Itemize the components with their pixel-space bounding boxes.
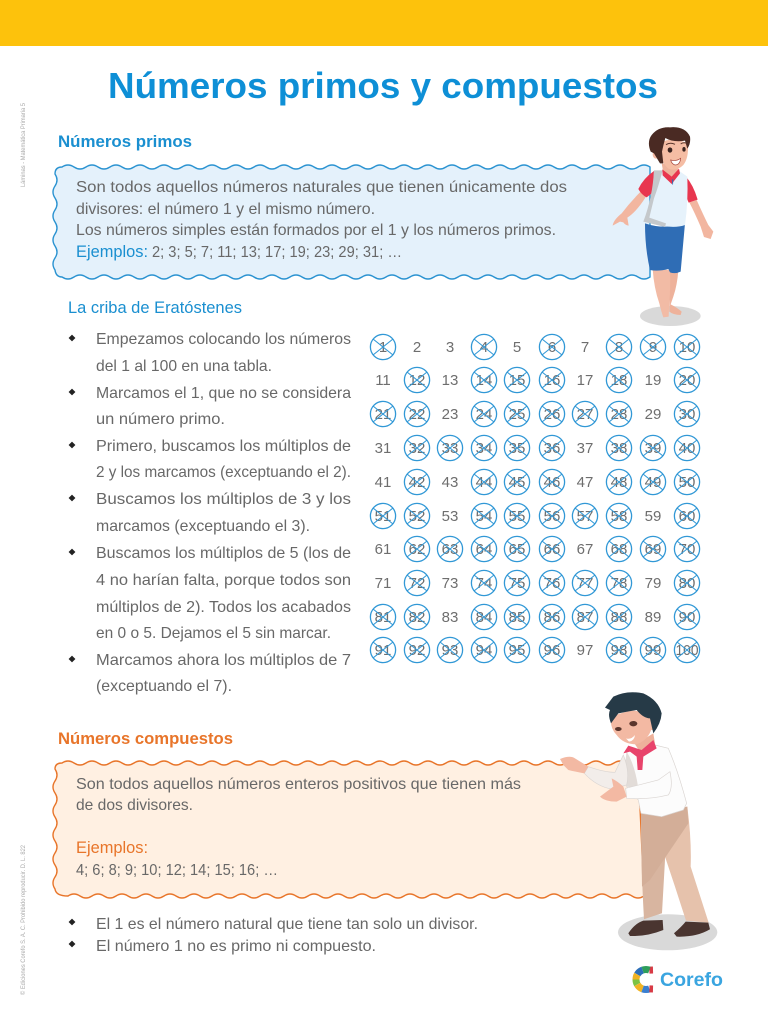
panel: números primos [53, 165, 650, 279]
sieve table 1 to 100: 55 [509, 508, 525, 525]
sieve table 1 to 100: 71 [375, 575, 391, 592]
sieve table 1 to 100: 93 [442, 642, 458, 659]
sieve table 1 to 100: 56 [544, 508, 560, 525]
sieve table 1 to 100: 7 [581, 339, 589, 356]
sieve table 1 to 100: 90 [679, 609, 695, 626]
sieve table 1 to 100: 86 [544, 609, 560, 626]
sieve table 1 to 100: 24 [476, 406, 492, 423]
sieve table 1 to 100: 91 [375, 642, 391, 659]
sieve table 1 to 100: 10 [679, 339, 695, 356]
sieve table 1 to 100 [370, 334, 700, 663]
sieve table 1 to 100: 44 [476, 474, 492, 491]
sieve table 1 to 100: 40 [679, 440, 695, 457]
sieve table 1 to 100: 77 [577, 575, 593, 592]
panel text: definition: 2; 3; 5; 7; 11; 13; 17; 19; 23; 29; 31; … [152, 244, 402, 261]
sieve table 1 to 100: 31 [375, 440, 391, 457]
panel: números compuestos [53, 761, 644, 898]
sieve table 1 to 100: 70 [679, 541, 695, 558]
sieve table 1 to 100: 97 [577, 642, 593, 659]
sieve table 1 to 100: 92 [409, 642, 425, 659]
panel text: definition: Son todos aquellos números naturales que tienen únicamente dos [76, 179, 567, 196]
sieve table 1 to 100: 32 [409, 440, 425, 457]
panel text: definition: Ejemplos: [76, 242, 148, 261]
sieve table 1 to 100: 58 [611, 508, 627, 525]
sieve table 1 to 100: 38 [611, 440, 627, 457]
sieve table 1 to 100: 89 [645, 609, 661, 626]
sieve table 1 to 100: 45 [509, 474, 525, 491]
sieve table 1 to 100: 20 [679, 372, 695, 389]
sieve table 1 to 100: 76 [544, 575, 560, 592]
sieve table 1 to 100: 46 [544, 474, 560, 491]
text block: sieve steps: 4 no harían falta, porque todos son [96, 572, 351, 589]
sieve table 1 to 100: 99 [645, 642, 661, 659]
side note: copyright: © Ediciones Corefo S. A. C. Prohibido reproducir. D. L. 822 [19, 845, 27, 995]
text block: sieve steps: Marcamos ahora los múltiplos de 7 [96, 652, 351, 669]
sieve table 1 to 100: 60 [679, 508, 695, 525]
panel text: composite definition: de dos divisores. [76, 797, 193, 814]
sieve table 1 to 100: 6 [548, 339, 556, 356]
text block: sieve steps: del 1 al 100 en una tabla. [96, 358, 272, 375]
sieve table 1 to 100: 12 [409, 372, 425, 389]
sieve table 1 to 100: 21 [375, 406, 391, 423]
head [649, 127, 690, 185]
text block: sieve steps: marcamos (exceptuando el 3). [96, 518, 310, 535]
sieve table 1 to 100: 34 [476, 440, 492, 457]
text block: sieve steps: en 0 o 5. Dejamos el 5 sin marcar. [96, 625, 331, 642]
sieve table 1 to 100: 69 [645, 541, 661, 558]
sieve table 1 to 100: 4 [480, 339, 488, 356]
panel text: definition [76, 179, 567, 261]
sieve table 1 to 100: 73 [442, 575, 458, 592]
sieve table 1 to 100: 54 [476, 508, 492, 525]
sieve table 1 to 100: 95 [509, 642, 525, 659]
sieve table 1 to 100: 27 [577, 406, 593, 423]
text block: sieve steps: Primero, buscamos los múltiplos de [96, 438, 351, 455]
top banner [0, 0, 768, 46]
sieve table 1 to 100: 22 [409, 406, 425, 423]
sieve table 1 to 100: 42 [409, 474, 425, 491]
sieve table 1 to 100: 14 [476, 372, 492, 389]
sieve table 1 to 100: 53 [442, 508, 458, 525]
sieve table 1 to 100: 85 [509, 609, 525, 626]
sieve table 1 to 100: 64 [476, 541, 492, 558]
character: boy in white shirt [560, 692, 717, 950]
heading: criba: La criba de Eratóstenes [68, 299, 242, 317]
sieve table 1 to 100: 98 [611, 642, 627, 659]
sieve table 1 to 100: 75 [509, 575, 525, 592]
sieve table 1 to 100: 57 [577, 508, 593, 525]
sieve table 1 to 100: 15 [509, 372, 525, 389]
sieve table 1 to 100: 96 [544, 642, 560, 659]
sieve table 1 to 100: 16 [544, 372, 560, 389]
sieve table 1 to 100: 63 [442, 541, 458, 558]
sieve table 1 to 100: 19 [645, 372, 661, 389]
panel text: composite definition [76, 776, 521, 879]
sieve table 1 to 100: 49 [645, 474, 661, 491]
sieve table 1 to 100: 52 [409, 508, 425, 525]
sieve table 1 to 100: 18 [611, 372, 627, 389]
text block: sieve steps: Buscamos los múltiplos de 5 (los de [96, 545, 351, 562]
sieve table 1 to 100: 33 [442, 440, 458, 457]
sieve table 1 to 100: 59 [645, 508, 661, 525]
sieve table 1 to 100: 81 [375, 609, 391, 626]
sieve table 1 to 100: 79 [645, 575, 661, 592]
sieve table 1 to 100: 26 [544, 406, 560, 423]
sieve table 1 to 100: 1 [379, 339, 387, 356]
text block: sieve steps: un número primo. [96, 411, 225, 428]
side note: series: Láminas - Matemática Primaria 5 [20, 103, 27, 187]
sieve table 1 to 100: 51 [375, 508, 391, 525]
sieve table 1 to 100: 25 [509, 406, 525, 423]
sieve table 1 to 100: 68 [611, 541, 627, 558]
sieve table 1 to 100: 82 [409, 609, 425, 626]
character: boy in blue shorts [613, 127, 713, 326]
sieve table 1 to 100: 17 [577, 372, 593, 389]
title: Números primos y compuestos [108, 65, 658, 106]
sieve table 1 to 100: 80 [679, 575, 695, 592]
sieve table 1 to 100: 13 [442, 372, 458, 389]
sieve table 1 to 100: 11 [375, 372, 391, 389]
sieve table 1 to 100: 37 [577, 440, 593, 457]
text block: sieve steps: 2 y los marcamos (exceptuando el 2). [96, 464, 351, 481]
sieve table 1 to 100: 88 [611, 609, 627, 626]
sieve table 1 to 100: 84 [476, 609, 492, 626]
sieve table 1 to 100: 100 [676, 642, 698, 659]
sieve table 1 to 100: 36 [544, 440, 560, 457]
sieve table 1 to 100: 48 [611, 474, 627, 491]
sieve table 1 to 100: 39 [645, 440, 661, 457]
sieve table 1 to 100: 72 [409, 575, 425, 592]
panel text: composite definition: Ejemplos: [76, 838, 148, 857]
notes below panel: El número 1 no es primo ni compuesto. [96, 938, 376, 955]
sieve table 1 to 100: 83 [442, 609, 458, 626]
sieve table 1 to 100: 66 [544, 541, 560, 558]
heading: números primos: Números primos [58, 132, 192, 151]
panel text: definition: divisores: el número 1 y el mismo número. [76, 201, 375, 218]
panel text: composite definition: 4; 6; 8; 9; 10; 12; 14; 15; 16; … [76, 862, 278, 879]
panel text: definition: Los números simples están formados por el 1 y los números primos. [76, 222, 556, 239]
sieve table 1 to 100: 23 [442, 406, 458, 423]
sieve table 1 to 100: 29 [645, 406, 661, 423]
text block: sieve steps: (exceptuando el 7). [96, 678, 232, 695]
sieve table 1 to 100: 2 [413, 339, 421, 356]
text block: sieve steps: Buscamos los múltiplos de 3 y los [96, 491, 351, 508]
sieve table 1 to 100: 28 [611, 406, 627, 423]
text block: sieve steps [69, 331, 351, 695]
sieve table 1 to 100: 78 [611, 575, 627, 592]
sieve table 1 to 100: 3 [446, 339, 454, 356]
heading: números compuestos: Números compuestos [58, 729, 233, 748]
sieve table 1 to 100: 30 [679, 406, 695, 423]
sieve table 1 to 100: 43 [442, 474, 458, 491]
sieve table 1 to 100: 47 [577, 474, 593, 491]
sieve table 1 to 100: 50 [679, 474, 695, 491]
sieve table 1 to 100: 5 [513, 339, 521, 356]
sieve table 1 to 100: 74 [476, 575, 492, 592]
sieve table 1 to 100: 41 [375, 474, 391, 491]
sieve table 1 to 100: 65 [509, 541, 525, 558]
upper body [560, 692, 687, 817]
sieve table 1 to 100: 61 [375, 541, 391, 558]
sieve table 1 to 100: 35 [509, 440, 525, 457]
text block: sieve steps: múltiplos de 2). Todos los acabados [96, 599, 351, 616]
notes below panel [69, 916, 478, 955]
sieve table 1 to 100: 62 [409, 541, 425, 558]
text block: sieve steps: Empezamos colocando los números [96, 331, 351, 348]
sieve table 1 to 100: 87 [577, 609, 593, 626]
sieve table 1 to 100: 9 [649, 339, 657, 356]
panel text: composite definition: Son todos aquellos números enteros positivos que tienen más [76, 776, 521, 793]
text block: sieve steps: Marcamos el 1, que no se considera [96, 385, 351, 402]
sieve table 1 to 100: 8 [615, 339, 623, 356]
logo: Corefo: Corefo [660, 969, 723, 991]
sieve table 1 to 100: 94 [476, 642, 492, 659]
sieve table 1 to 100: 67 [577, 541, 593, 558]
notes below panel: El 1 es el número natural que tiene tan solo un divisor. [96, 916, 478, 933]
